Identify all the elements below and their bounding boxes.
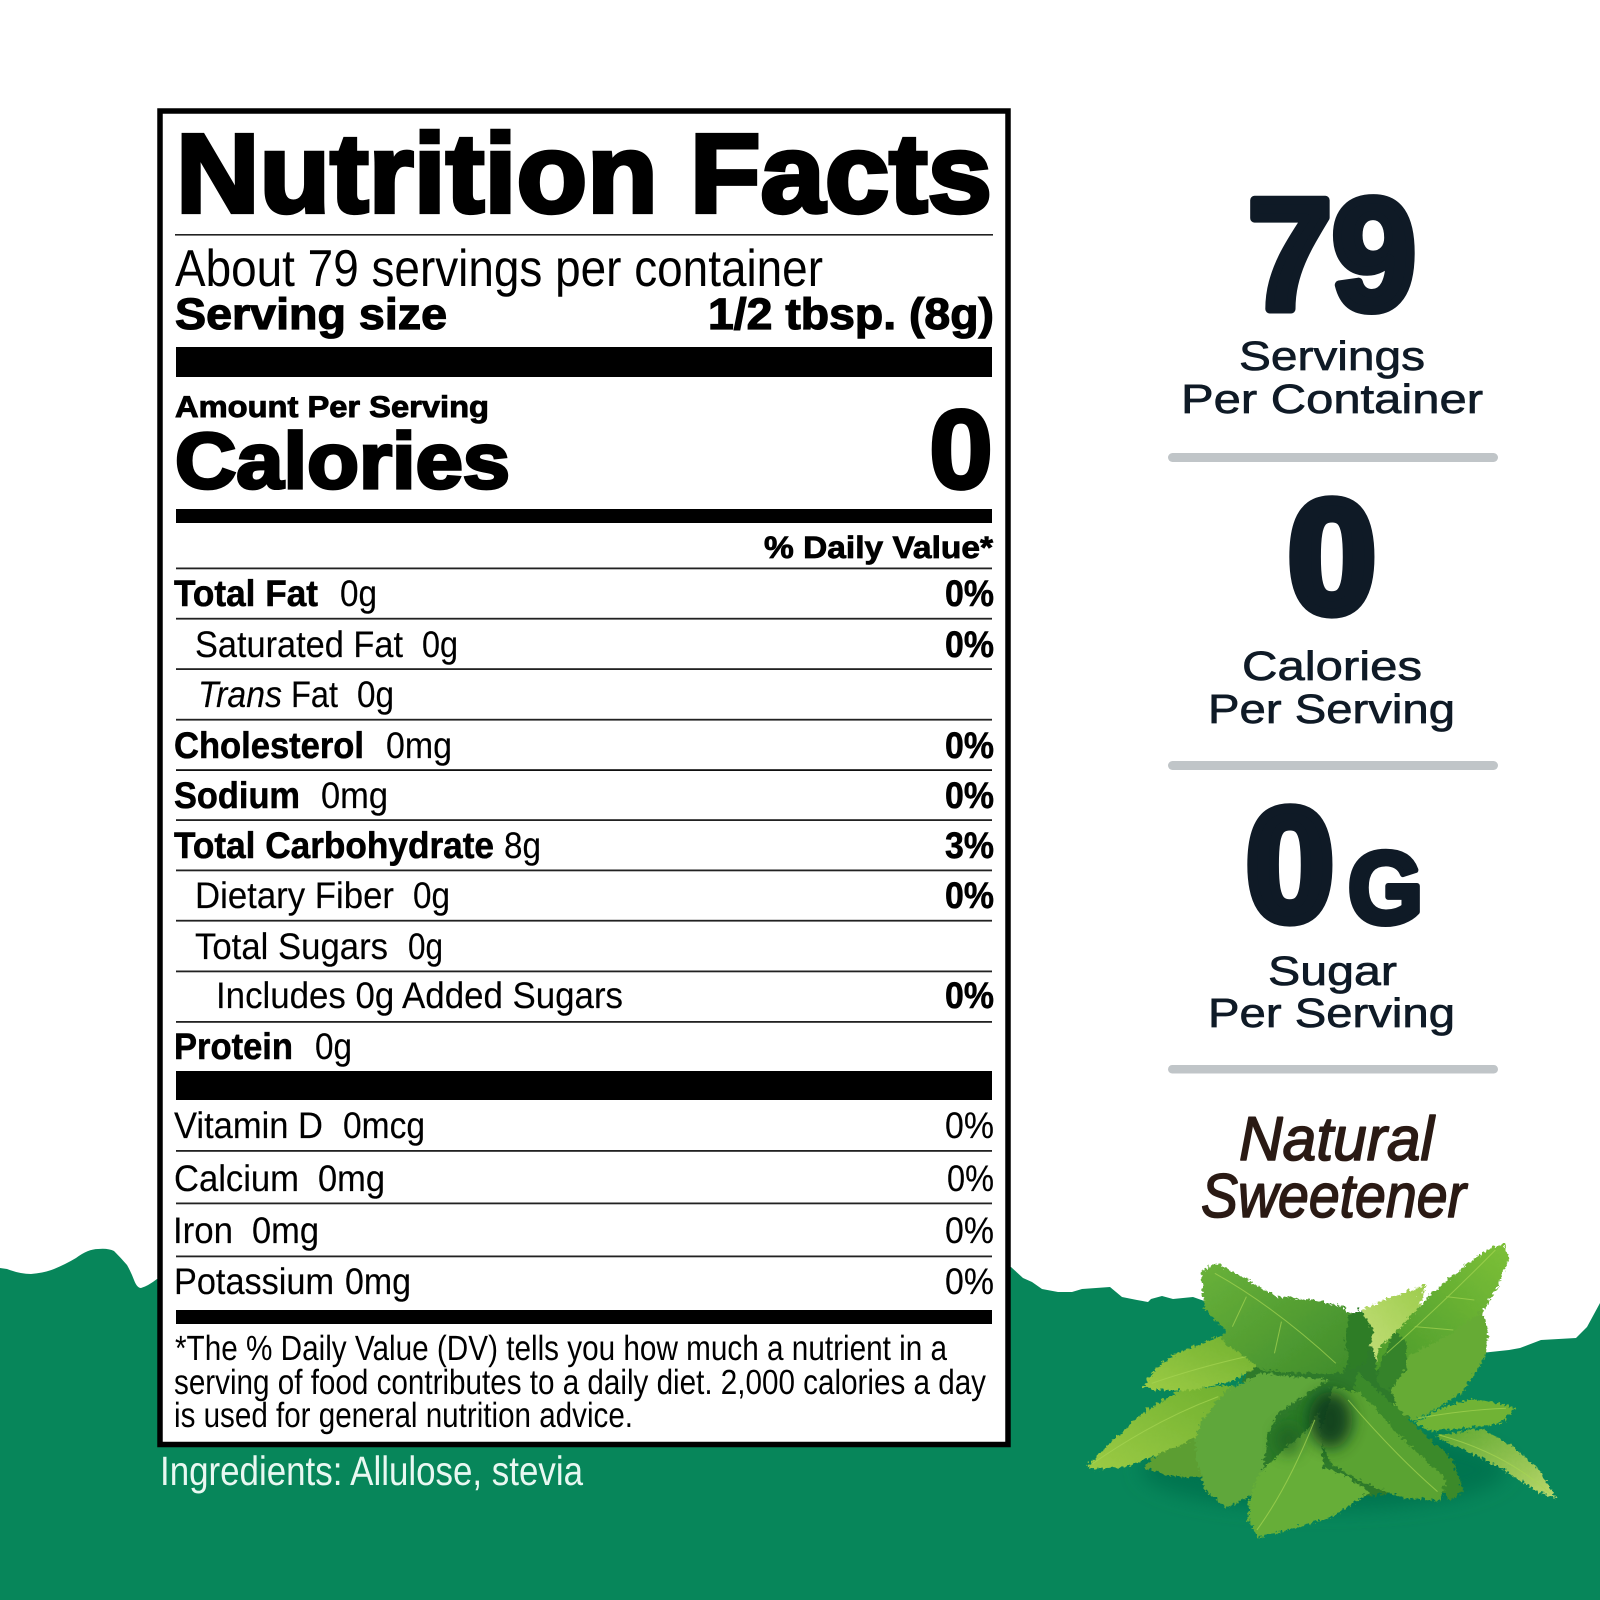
row: iron: 0% bbox=[945, 1210, 994, 1251]
row: dietary fiber: 0% bbox=[945, 875, 994, 916]
calories bbox=[175, 387, 993, 512]
row: calcium: 0% bbox=[947, 1158, 994, 1199]
footnote: *The % Daily Value (DV) tells you how much a nutrient in a bbox=[175, 1329, 947, 1368]
stat: 0 calories per serving bbox=[1208, 467, 1455, 732]
row: dietary fiber: 0g bbox=[413, 875, 450, 916]
row: added sugars: Includes 0g Added Sugars bbox=[216, 975, 623, 1016]
stat: 0 calories per serving: Per Serving bbox=[1208, 686, 1455, 732]
natural sweetener script: Sweetener bbox=[1201, 1162, 1468, 1231]
amount per serving: Amount Per Serving bbox=[175, 391, 489, 424]
panel: nutrition facts label bbox=[160, 111, 1008, 1444]
label frame bbox=[160, 111, 1008, 1444]
row: potassium: 0mg bbox=[345, 1261, 411, 1302]
stat: 0g sugar per serving: Per Serving bbox=[1208, 990, 1455, 1036]
footnote: serving of food contributes to a daily diet. 2,000 calories a day bbox=[174, 1363, 986, 1402]
icon: stevia leaves bbox=[1085, 1242, 1555, 1536]
stat: 79 servings per container: Servings bbox=[1239, 333, 1425, 379]
row: vitamin D: 0mcg bbox=[343, 1105, 425, 1146]
row: dietary fiber bbox=[195, 875, 994, 916]
row: saturated fat: 0g bbox=[422, 624, 458, 665]
row: total sugars: 0g bbox=[408, 926, 443, 967]
footnote: is used for general nutrition advice. bbox=[174, 1396, 633, 1435]
row: added sugars bbox=[216, 975, 994, 1016]
ingredients line: Ingredients: Allulose, stevia bbox=[160, 1448, 583, 1494]
stat: 0g sugar per serving: Sugar bbox=[1268, 948, 1397, 994]
row: total fat bbox=[174, 573, 994, 614]
daily value header: % Daily Value* bbox=[764, 530, 994, 565]
row: potassium: Potassium bbox=[174, 1261, 334, 1302]
row: calcium: Calcium bbox=[174, 1158, 299, 1199]
row: dietary fiber: Dietary Fiber bbox=[195, 875, 394, 916]
row: sodium bbox=[174, 775, 994, 816]
stat: 0g sugar per serving bbox=[1208, 775, 1455, 1036]
row: total carbohydrate: 3% bbox=[945, 825, 994, 866]
row: sodium: 0% bbox=[945, 775, 994, 816]
row: iron bbox=[173, 1210, 994, 1251]
row: total sugars: Total Sugars bbox=[195, 926, 388, 967]
row: iron: Iron bbox=[173, 1210, 233, 1251]
natural sweetener script: Natural bbox=[1239, 1105, 1436, 1174]
row: cholesterol: Cholesterol bbox=[174, 725, 364, 766]
stat: 0 calories per serving: 0 bbox=[1288, 467, 1376, 646]
row: iron: 0mg bbox=[252, 1210, 319, 1251]
row: saturated fat: Saturated Fat bbox=[195, 624, 404, 665]
row: protein: Protein bbox=[174, 1026, 293, 1067]
footnote bbox=[174, 1329, 986, 1435]
serving size: 1/2 tbsp. (8g) bbox=[708, 290, 994, 339]
calories: 0 bbox=[929, 387, 993, 512]
stat: 0g sugar per serving: 0 bbox=[1246, 775, 1334, 954]
stat: 79 servings per container: 79 bbox=[1248, 167, 1416, 343]
row: total carbohydrate: 8g bbox=[504, 825, 541, 866]
row: trans fat: 0g bbox=[357, 674, 394, 715]
row: potassium: 0% bbox=[945, 1261, 994, 1302]
stat: 79 servings per container: Per Container bbox=[1181, 376, 1483, 422]
row: cholesterol: 0% bbox=[945, 725, 994, 766]
row: trans fat: Trans bbox=[198, 674, 282, 715]
row: potassium bbox=[174, 1261, 994, 1302]
row: cholesterol bbox=[174, 725, 994, 766]
stat: 79 servings per container bbox=[1181, 167, 1483, 422]
row: saturated fat: 0% bbox=[945, 624, 994, 665]
row: vitamin D bbox=[174, 1105, 994, 1146]
green torn-paper background bbox=[0, 1249, 1600, 1600]
natural sweetener script bbox=[1201, 1105, 1468, 1231]
serving size: Serving size bbox=[175, 290, 447, 339]
serving size bbox=[175, 290, 994, 339]
row: protein: 0g bbox=[315, 1026, 352, 1067]
row: calcium: 0mg bbox=[318, 1158, 385, 1199]
row: cholesterol: 0mg bbox=[386, 725, 452, 766]
row: sodium: Sodium bbox=[174, 775, 300, 816]
stat: 0g sugar per serving: G bbox=[1348, 831, 1423, 945]
row: added sugars: 0% bbox=[945, 975, 994, 1016]
row: total carbohydrate bbox=[174, 825, 994, 866]
row: total carbohydrate: Total Carbohydrate bbox=[174, 825, 494, 866]
row: total fat: 0g bbox=[340, 573, 377, 614]
row: trans fat: Fat bbox=[291, 674, 339, 715]
row: vitamin D: 0% bbox=[945, 1105, 994, 1146]
heading: Nutrition Facts: Nutrition Facts bbox=[176, 111, 992, 236]
stat: 0 calories per serving: Calories bbox=[1242, 643, 1422, 689]
row: total fat: Total Fat bbox=[174, 573, 318, 614]
row: sodium: 0mg bbox=[321, 775, 388, 816]
row: saturated fat bbox=[195, 624, 994, 665]
calories: Calories bbox=[175, 416, 510, 505]
servings per container: About 79 servings per container bbox=[175, 240, 823, 298]
row: vitamin D: Vitamin D bbox=[174, 1105, 323, 1146]
row: calcium bbox=[174, 1158, 994, 1199]
row: trans fat bbox=[198, 674, 394, 715]
row: total fat: 0% bbox=[945, 573, 994, 614]
